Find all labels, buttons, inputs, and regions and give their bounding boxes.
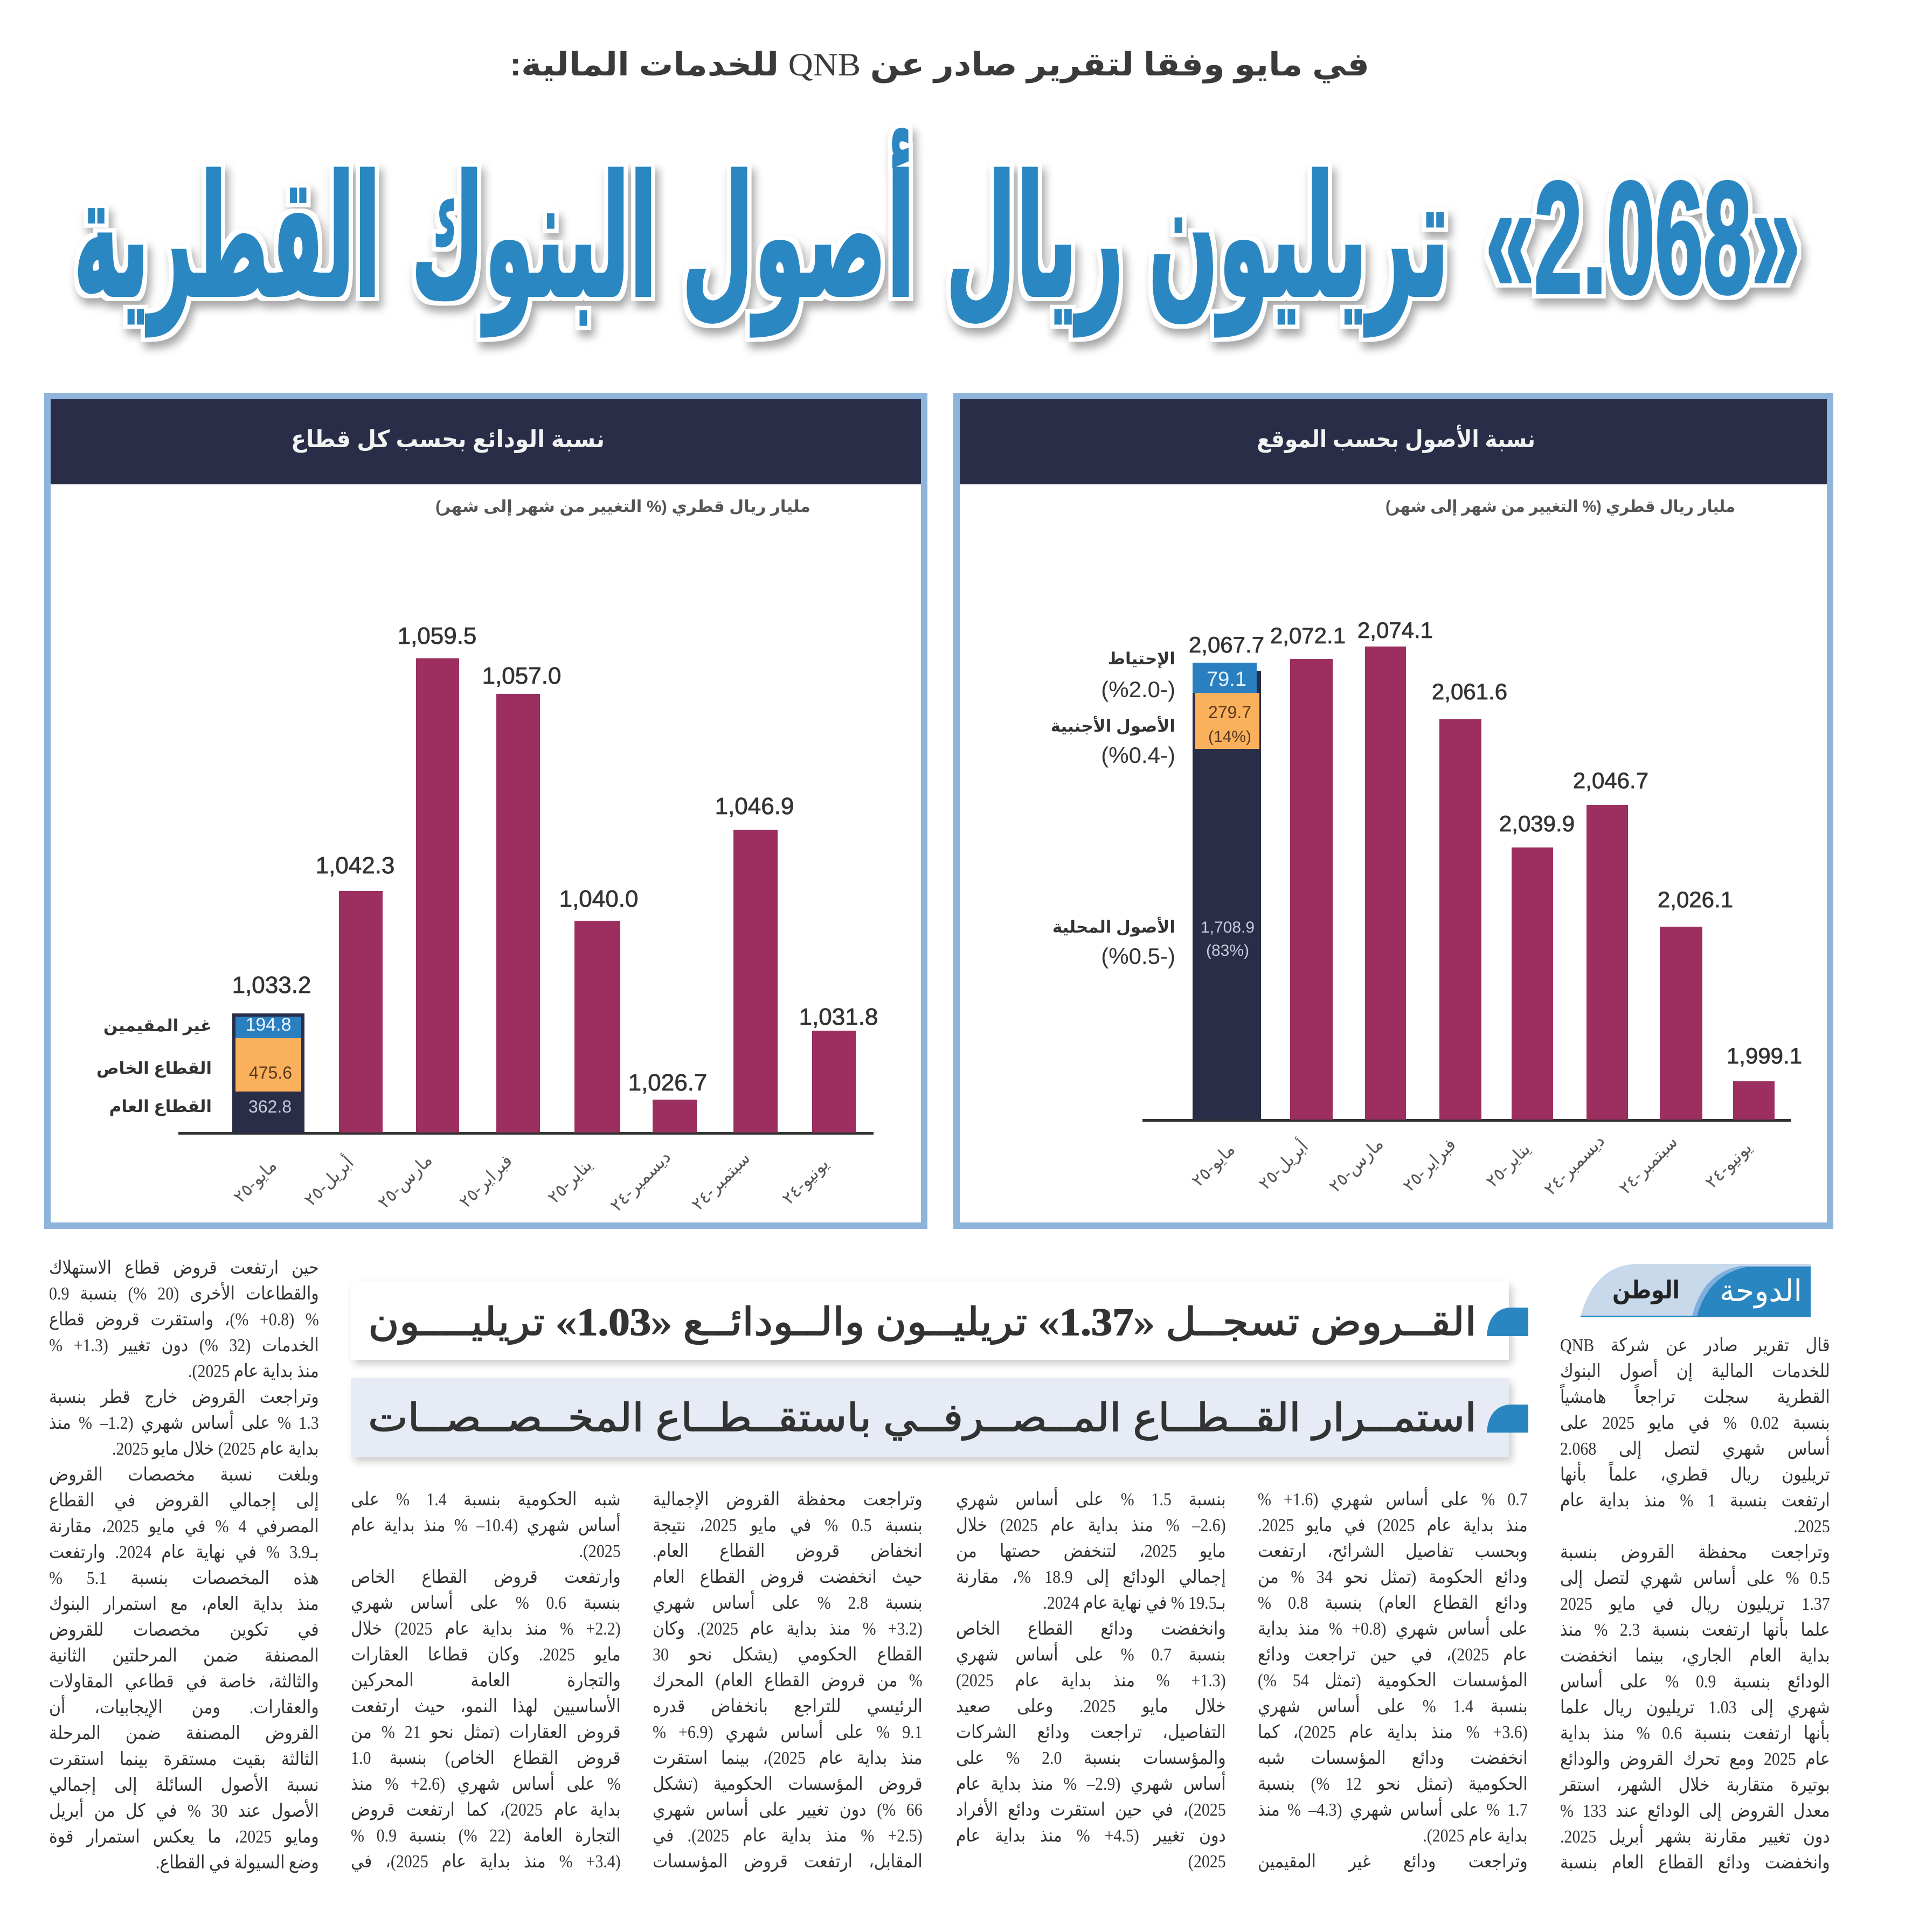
article column 4: منذ بداية عام 2025)، بينما استقرت xyxy=(653,1748,923,1768)
article column 2 xyxy=(1258,1487,1528,1872)
value labels: 1,042.3 xyxy=(316,852,394,879)
article column 1: الودائع بنسبة 0.9 % على أساس xyxy=(1560,1672,1830,1692)
article column 5: قروض العقارات (تمثل نحو 21 % من xyxy=(351,1722,621,1742)
source badge: الوطن xyxy=(1612,1276,1680,1304)
article column 6: الثالثة بقيت مستقرة بينما استقرت xyxy=(49,1749,319,1769)
stacked bar May 25: 1,708.9 xyxy=(1201,919,1255,936)
panel header: نسبة الودائع بحسب كل قطاع xyxy=(291,426,605,453)
article column 4: حيث انخفضت قروض القطاع العام xyxy=(653,1567,923,1587)
article column 4: 9.1 % على أساس شهري (6.9+ % xyxy=(653,1722,923,1742)
article column 1: 1.37 تريليون ريال في مايو 2025 xyxy=(1560,1594,1830,1614)
article column 6: والثالثة، خاصة في قطاعي المقاولات xyxy=(49,1672,319,1692)
article column 3: بنسبة 0.7 % على أساس شهري xyxy=(956,1645,1226,1665)
stack percent labels: (%0.5-) xyxy=(1101,943,1175,969)
article column 6: منذ بداية العام، مع استمرار البنوك xyxy=(49,1594,319,1614)
article column 5: بداية عام 2025)، كما ارتفعت قروض xyxy=(351,1800,621,1820)
stacked bar May 25 xyxy=(1193,663,1261,1120)
article column 4: (3.2+ % منذ بداية عام 2025). وكان xyxy=(653,1619,923,1639)
stack labels xyxy=(1051,649,1175,937)
article column 1: بوتيرة متقاربة خلال الشهر، استقر xyxy=(1560,1775,1830,1795)
stack percent labels: (%2.0-) xyxy=(1101,677,1175,702)
article column 5: أساس شهري (10.4– % منذ بداية عام xyxy=(351,1516,621,1535)
article column 1: بأنها ارتفعت بنسبة 0.6 % منذ بداية xyxy=(1560,1723,1830,1743)
article column 1: بداية العام الجاري، بينما انخفضت xyxy=(1560,1646,1830,1666)
value labels: 2,061.6 xyxy=(1432,679,1507,704)
article column 5: % على أساس شهري (2.6+ % منذ xyxy=(351,1774,621,1794)
article column 6: المصرفي 4 % في مايو 2025، مقارنة xyxy=(49,1517,319,1537)
article column 4: قروض المؤسسات الحكومية (تشكل xyxy=(653,1774,923,1794)
bars xyxy=(1290,647,1775,1120)
article column 3: دون تغيير (4.5+ % منذ بداية عام xyxy=(956,1826,1226,1846)
title: القطرية xyxy=(74,144,380,337)
article column 4: 66 %) دون تغيير على أساس شهري xyxy=(653,1800,923,1820)
month axis labels: سبتمبر-٢٤ xyxy=(1615,1132,1681,1198)
subtitle: في مايو وفقا لتقرير صادر عن QNB للخدمات المالية: xyxy=(510,46,1369,84)
month axis labels: مارس-٢٥ xyxy=(1325,1134,1387,1196)
article column 1: عام 2025 ومع تحرك القروض والودائع xyxy=(1560,1749,1830,1769)
panel: assets by location chart xyxy=(953,393,1833,1229)
article column 6: نسبة الأصول السائلة إلى إجمالي xyxy=(49,1775,319,1795)
value labels: 2,074.1 xyxy=(1357,617,1433,643)
stacked bar May 25: 362.8 xyxy=(248,1097,292,1116)
article column 6: منذ بداية عام 2025). xyxy=(188,1361,319,1381)
value labels: 1,033.2 xyxy=(232,972,311,998)
article column 3: أساس شهري (2.9– % منذ بداية عام xyxy=(956,1774,1226,1794)
article column 1: بنسبة 0.02 % في مايو 2025 على xyxy=(1560,1413,1830,1433)
title: أصول xyxy=(682,128,915,337)
article column 3 xyxy=(956,1487,1226,1872)
value labels: 1,040.0 xyxy=(559,886,638,912)
article column 6: والعقارات. ومن الإيجابيات، أن xyxy=(49,1698,319,1718)
panel header: نسبة الأصول بحسب الموقع xyxy=(1257,425,1535,453)
article column 6 xyxy=(49,1255,319,1876)
article column 3: (1.3+ % منذ بداية عام 2025) xyxy=(956,1671,1226,1691)
article column 1: 0.5 % على أساس شهري لتصل إلى xyxy=(1560,1568,1830,1588)
month axis labels: مايو-٢٥ xyxy=(230,1156,281,1207)
value labels: 2,039.9 xyxy=(1499,811,1575,836)
article column 1: القطرية سجلت تراجعاً هامشياً xyxy=(1560,1387,1830,1407)
article column 4: بنسبة 0.5 % في مايو 2025، نتيجة xyxy=(653,1516,923,1535)
article column 1: علما بأنها ارتفعت بنسبة 2.3 % منذ xyxy=(1560,1620,1830,1640)
article column 6: والقطاعات الأخرى (20 %) بنسبة 0.9 xyxy=(49,1284,319,1304)
article column 6: بداية عام 2025) خلال مايو 2025. xyxy=(112,1439,319,1459)
headline bar 1 xyxy=(351,1281,1509,1360)
article column 1: قال تقرير صادر عن شركة QNB xyxy=(1560,1336,1830,1356)
article column 1: أساس شهري لتصل إلى 2.068 xyxy=(1560,1439,1830,1459)
value labels: 2,026.1 xyxy=(1658,887,1733,912)
article column 2: وتراجعت ودائع غير المقيمين xyxy=(1258,1852,1528,1872)
value labels: 1,031.8 xyxy=(799,1004,878,1030)
article column 6: وضع السيولة في القطاع. xyxy=(156,1853,319,1873)
article column 5: (2.2+ % منذ بداية عام 2025) خلال xyxy=(351,1619,621,1639)
value labels: 2,072.1 xyxy=(1270,623,1346,648)
headline flag 2 xyxy=(1487,1405,1528,1433)
article column 4: بنسبة 2.8 % على أساس شهري xyxy=(653,1593,923,1613)
month axis labels: مارس-٢٥ xyxy=(374,1150,436,1212)
month axis labels: أبريل-٢٥ xyxy=(299,1151,358,1210)
article column 4 xyxy=(653,1487,923,1875)
article column 2: عام 2025)، في حين تراجعت ودائع xyxy=(1258,1645,1528,1665)
article column 2: المؤسسات الحكومية (تمثل 54 %) xyxy=(1258,1671,1528,1691)
stack labels: الأصول المحلية xyxy=(1052,916,1175,937)
article column 1: 2025. xyxy=(1793,1517,1830,1537)
stack percent labels: (%0.4-) xyxy=(1101,742,1175,768)
headline text 1: القــروض تسجــل «1.37» تريليــون والــودائــع «1.03» تريليــــون xyxy=(368,1301,1477,1345)
article column 6: هذه المخصصات بنسبة 5.1 % xyxy=(49,1568,319,1588)
month axis labels: أبريل-٢٥ xyxy=(1253,1135,1312,1194)
article column 3: التفاصيل، تراجعت ودائع الشركات xyxy=(956,1722,1226,1742)
article column 6: القروض المصنفة ضمن المرحلة xyxy=(49,1723,319,1743)
title: «2.068» xyxy=(1486,149,1800,326)
stacked bar May 25 xyxy=(232,1013,304,1133)
article column 1: شهري إلى 1.03 تريليون ريال علما xyxy=(1560,1698,1830,1718)
article column 5: التجارة العامة (22 %) بنسبة 0.9 % xyxy=(351,1826,621,1846)
stacked bar May 25: 79.1 xyxy=(1207,668,1246,691)
month axis labels: ديسمبر-٢٤ xyxy=(606,1147,675,1215)
panel header xyxy=(51,399,921,484)
article column 3: إجمالي الودائع إلى 18.9 %، مقارنة xyxy=(956,1567,1226,1587)
article column 4: انخفاض قروض القطاع العام. xyxy=(653,1541,923,1561)
value labels: 1,059.5 xyxy=(398,623,476,649)
title xyxy=(71,126,1810,353)
article column 1: معدل القروض إلى الودائع عند 133 % xyxy=(1560,1801,1830,1821)
value labels xyxy=(1189,617,1802,1068)
stacked bar May 25: 279.7 xyxy=(1208,703,1251,722)
article column 2: الحكومية (تمثل نحو 12 %) بنسبة xyxy=(1258,1774,1528,1794)
article column 5: الأساسيين لهذا النمو، حيث ارتفعت xyxy=(351,1697,621,1716)
article column 4: % من قروض القطاع العام) المحرك xyxy=(653,1671,923,1691)
article column 1: وانخفضت ودائع القطاع العام بنسبة xyxy=(1560,1853,1830,1873)
title: تريليون xyxy=(1148,144,1449,337)
month axis labels: سبتمبر-٢٤ xyxy=(688,1148,754,1214)
article column 1: تريليون ريال قطري، علماً بأنها xyxy=(1560,1465,1830,1485)
article column 3: خلال مايو 2025. وعلى صعيد xyxy=(956,1697,1226,1716)
article column 2: (3.6+ % منذ بداية عام 2025)، كما xyxy=(1258,1722,1528,1742)
article column 6: الخدمات (32 %) دون تغيير (1.3+ % xyxy=(49,1336,319,1356)
stack labels xyxy=(96,1016,212,1116)
article column 2: ودائع القطاع العام) بنسبة 0.8 % xyxy=(1258,1593,1528,1613)
article column 5: 2025). xyxy=(579,1541,621,1561)
article column 4: المقابل، ارتفعت قروض المؤسسات xyxy=(653,1852,923,1872)
month axis labels: فبراير-٢٥ xyxy=(1399,1135,1460,1196)
bar chart: deposits xyxy=(96,623,878,1215)
article column 5: شبه الحكومية بنسبة 1.4 % على xyxy=(351,1490,621,1510)
article column 5: وارتفعت قروض القطاع الخاص xyxy=(351,1567,621,1587)
value labels: 2,067.7 xyxy=(1189,632,1264,657)
article column 3: والمؤسسات بنسبة 2.0 % على xyxy=(956,1748,1226,1768)
article column 5: قروض القطاع الخاص) بنسبة 1.0 xyxy=(351,1748,621,1768)
stack labels: القطاع العام xyxy=(109,1097,212,1116)
article column 2: منذ بداية عام 2025) في مايو 2025. xyxy=(1258,1516,1528,1535)
value labels xyxy=(232,623,878,1096)
headline text 2: استمــرار القــطــاع المــصــرفــي باستقــطــاع المخــصــصــات xyxy=(368,1396,1477,1441)
month axis labels: يناير-٢٥ xyxy=(544,1155,596,1207)
article column 2: 1.7 % على أساس شهري (4.3– % منذ xyxy=(1258,1800,1528,1820)
chart unit note: مليار ريال قطري (% التغيير من شهر إلى شهر) xyxy=(1385,498,1735,516)
stack labels: القطاع الخاص xyxy=(96,1059,212,1078)
article column 3: بنسبة 1.5 % على أساس شهري xyxy=(956,1490,1226,1510)
panel: deposits by sector chart xyxy=(44,393,927,1229)
value labels: 1,026.7 xyxy=(628,1069,707,1096)
title: البنوك xyxy=(411,144,657,337)
stacked bar May 25: (83%) xyxy=(1206,942,1249,960)
article column 5: (3.4+ % منذ بداية عام 2025)، في xyxy=(351,1852,621,1872)
month axis labels: يونيو-٢٤ xyxy=(1701,1138,1756,1192)
article column 2: انخفضت ودائع المؤسسات شبه xyxy=(1258,1748,1528,1768)
article column 4: (2.5+ % منذ بداية عام 2025). في xyxy=(653,1826,923,1846)
article column 6: الأصول عند 30 % في كل من أبريل xyxy=(49,1801,319,1821)
stack labels: الأصول الأجنبية xyxy=(1051,715,1175,736)
article column 2: 0.7 % على أساس شهري (1.6+ % xyxy=(1258,1490,1528,1510)
article column 6: وتراجعت القروض خارج قطر بنسبة xyxy=(49,1387,319,1407)
article column 1: للخدمات المالية إن أصول البنوك xyxy=(1560,1361,1830,1381)
stack percent labels xyxy=(1101,677,1175,969)
stacked bar May 25: 194.8 xyxy=(245,1014,292,1035)
article column 6: 1.3 % على أساس شهري (1.2– % منذ xyxy=(49,1413,319,1433)
article column 4: القطاع الحكومي (يشكل نحو 30 xyxy=(653,1645,923,1665)
article column 1 xyxy=(1560,1336,1830,1873)
article column 5: بنسبة 0.6 % على أساس شهري xyxy=(351,1593,621,1613)
article column 1: وتراجعت محفظة القروض بنسبة xyxy=(1560,1542,1830,1562)
value labels: 1,046.9 xyxy=(715,793,794,819)
headline bar 2 xyxy=(351,1378,1509,1457)
article column 3: وانخفضت ودائع القطاع الخاص xyxy=(956,1619,1226,1639)
headline flag 1 xyxy=(1487,1308,1528,1336)
article column 3: 2025)، في حين استقرت ودائع الأفراد xyxy=(956,1800,1226,1820)
headlines xyxy=(368,1301,1528,1441)
stacked bar May 25: 475.6 xyxy=(249,1063,292,1082)
month axis labels: يونيو-٢٤ xyxy=(778,1154,833,1208)
article column 1: دون تغيير مقارنة بشهر أبريل 2025. xyxy=(1560,1827,1830,1847)
article column 6: في تكوين مخصصات للقروض xyxy=(49,1620,319,1640)
source badge: الدوحة xyxy=(1720,1274,1802,1309)
article column 2: ودائع الحكومة (تمثل نحو 34 % من xyxy=(1258,1567,1528,1587)
article column 3: بـ19.5 % في نهاية عام 2024. xyxy=(1043,1593,1226,1613)
article column 4: وتراجعت محفظة القروض الإجمالية xyxy=(653,1490,923,1510)
value labels: 1,999.1 xyxy=(1727,1043,1802,1068)
stacked bar May 25: (14%) xyxy=(1208,728,1251,746)
month axis labels xyxy=(1188,1131,1756,1199)
article column 5: والتجارة العامة المحركين xyxy=(351,1671,621,1691)
month axis labels: يناير-٢٥ xyxy=(1482,1139,1534,1191)
month axis labels: ديسمبر-٢٤ xyxy=(1540,1131,1609,1199)
source badge xyxy=(1581,1264,1811,1317)
stack labels: غير المقيمين xyxy=(103,1016,212,1036)
month axis labels xyxy=(230,1147,833,1215)
article column 6: إلى إجمالي القروض في القطاع xyxy=(49,1491,319,1511)
article column 6: المصنفة ضمن المرحلتين الثانية xyxy=(49,1646,319,1666)
value labels: 1,057.0 xyxy=(482,663,561,689)
article column 4: الرئيسي للتراجع بانخفاض قدره xyxy=(653,1697,923,1716)
month axis labels: مايو-٢٥ xyxy=(1188,1139,1239,1191)
article column 2: بداية عام 2025). xyxy=(1423,1826,1528,1846)
article column 5: مايو 2025. وكان قطاعا العقارات xyxy=(351,1645,621,1665)
article column 5 xyxy=(351,1487,621,1875)
value labels: 2,046.7 xyxy=(1573,768,1648,793)
stack labels: الإحتياط xyxy=(1108,649,1175,668)
month axis labels: فبراير-٢٥ xyxy=(455,1151,516,1212)
article column 3: (2.6– % منذ بداية عام 2025) خلال xyxy=(956,1516,1226,1535)
article column 3: 2025) xyxy=(1188,1852,1226,1872)
article column 6: ومايو 2025، ما يعكس استمرار قوة xyxy=(49,1827,319,1847)
title: ريال xyxy=(946,144,1124,337)
bar chart: assets xyxy=(1051,617,1802,1199)
article column 6: حين ارتفعت قروض قطاع الاستهلاك xyxy=(49,1258,319,1278)
bars xyxy=(339,658,856,1132)
article column 3: مايو 2025، لتنخفض حصتها من xyxy=(956,1541,1226,1561)
article column 2: وبحسب تفاصيل الشرائح، ارتفعت xyxy=(1258,1541,1528,1561)
article column 6: وبلغت نسبة مخصصات القروض xyxy=(49,1465,319,1485)
article column 2: بنسبة 1.4 % على أساس شهري xyxy=(1258,1697,1528,1716)
article column 6: بـ3.9 % في نهاية عام 2024. وارتفعت xyxy=(49,1542,319,1562)
chart unit note: مليار ريال قطري (% التغيير من شهر إلى شهر) xyxy=(435,498,810,516)
panel header xyxy=(960,399,1827,484)
article column 6: % (0.8+ %)، واستقرت قروض قطاع xyxy=(49,1310,319,1330)
article column 1: ارتفعت بنسبة 1 % منذ بداية عام xyxy=(1560,1491,1830,1511)
article column 2: على أساس شهري (0.8+ % منذ بداية xyxy=(1258,1619,1528,1639)
